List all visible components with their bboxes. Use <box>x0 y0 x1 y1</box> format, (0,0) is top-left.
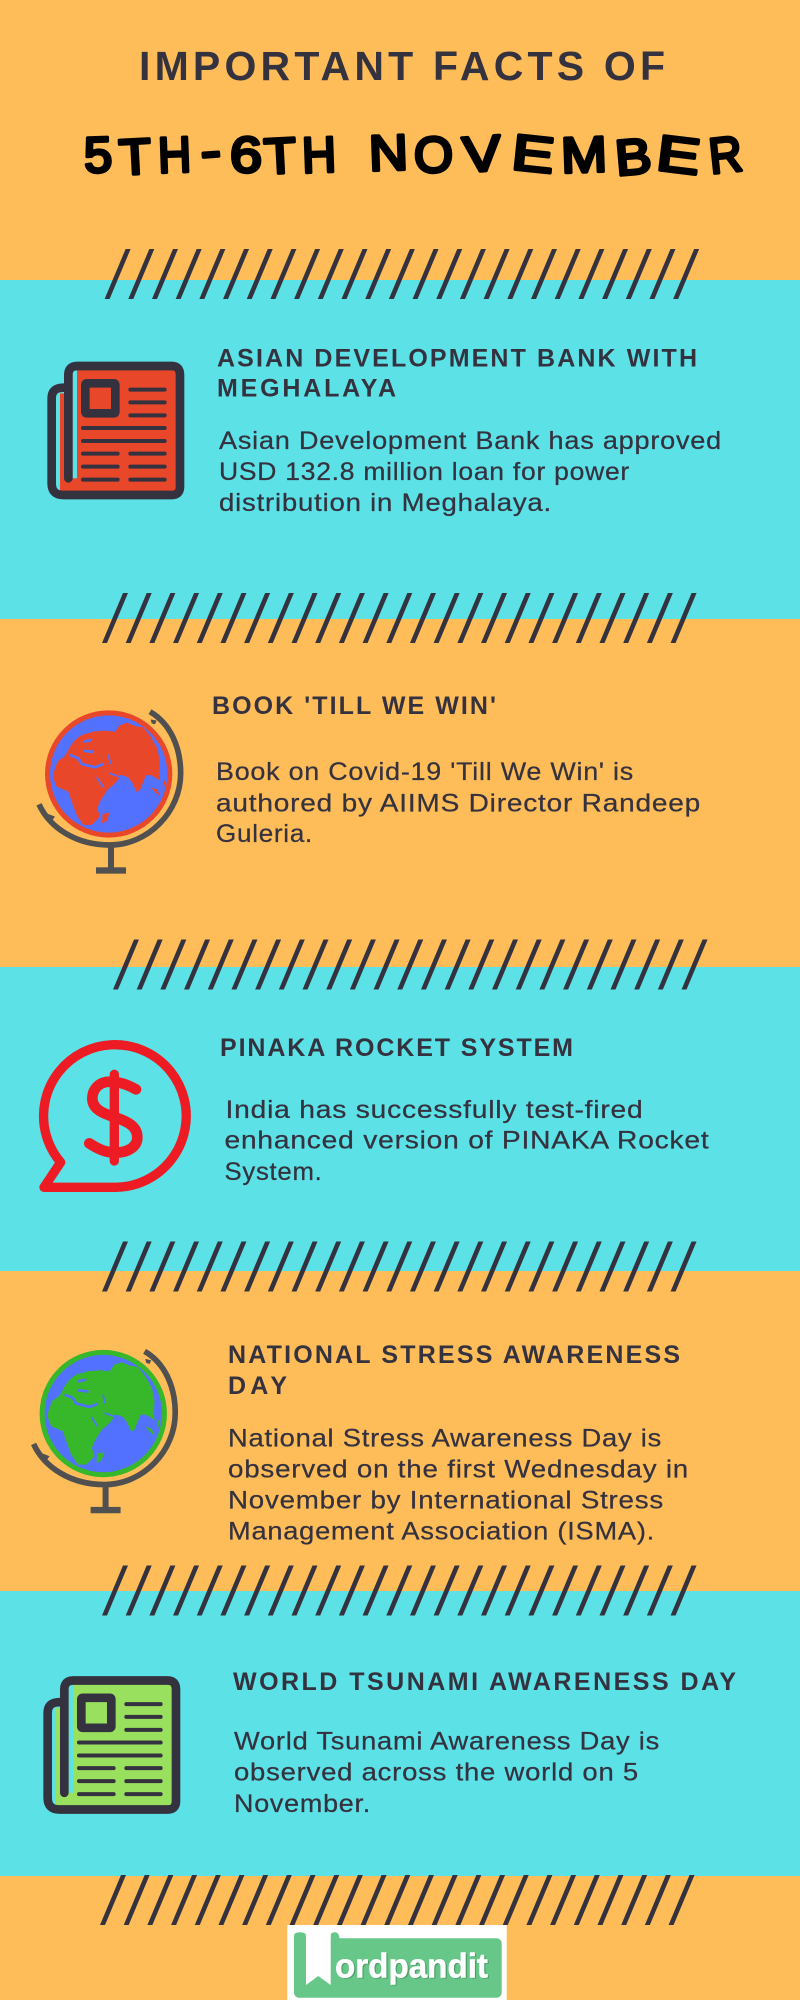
title: date <box>83 122 745 186</box>
title: important facts of: IMPORTANT FACTS OF <box>139 43 665 89</box>
title: date: 5 <box>83 127 113 183</box>
text block: November by International Stress <box>228 1486 664 1514</box>
title: date: N <box>368 124 409 182</box>
title: date: 6 <box>230 127 262 183</box>
icon: red globe <box>39 710 181 874</box>
heading: PINAKA ROCKET SYSTEM <box>220 1034 573 1062</box>
logo: Wordpandit: ordpandit <box>335 1947 488 1985</box>
text block: Management Association (ISMA). <box>228 1518 655 1546</box>
heading: DAY <box>228 1372 287 1400</box>
text block: observed on the first Wednesday in <box>228 1456 689 1484</box>
title: date: T <box>263 127 297 185</box>
text block: World Tsunami Awareness Day is <box>234 1728 660 1756</box>
text block: Guleria. <box>216 820 313 848</box>
panel: Book Till We Win <box>0 619 800 967</box>
title: date: H <box>301 126 337 184</box>
logo: Wordpandit <box>287 1925 507 2000</box>
title: date: M <box>560 126 608 184</box>
icon: green newspaper <box>48 1680 176 1809</box>
heading: ASIAN DEVELOPMENT BANK WITH <box>217 344 697 372</box>
panel: World Tsunami Awareness Day <box>0 1591 800 1876</box>
title: date: B <box>613 128 654 186</box>
title: date: H <box>157 126 192 184</box>
heading <box>228 1341 680 1400</box>
title: date: T <box>118 128 153 186</box>
heading: MEGHALAYA <box>217 374 396 402</box>
heading: BOOK 'TILL WE WIN' <box>212 692 496 720</box>
text block: India has successfully test-fired <box>226 1096 644 1124</box>
panel: Asian Development Bank <box>0 280 800 619</box>
heading: NATIONAL STRESS AWARENESS <box>228 1341 680 1369</box>
title: date: V <box>461 125 504 183</box>
panel: footer <box>0 1876 800 2000</box>
text block <box>228 1424 689 1546</box>
text block: USD 132.8 million loan for power <box>219 458 630 486</box>
panel: Pinaka Rocket System <box>0 967 800 1271</box>
text block <box>224 1096 710 1186</box>
logo: Wordpandit: ordpandit <box>336 1948 490 1986</box>
text block: distribution in Meghalaya. <box>219 489 552 517</box>
text block: System. <box>224 1158 322 1186</box>
icon: dollar speech bubble <box>44 1045 186 1187</box>
text block <box>216 758 701 848</box>
heading: WORLD TSUNAMI AWARENESS DAY <box>233 1668 736 1696</box>
text block: authored by AIIMS Director Randeep <box>216 790 701 818</box>
icon: green globe <box>34 1350 175 1513</box>
text block: enhanced version of PINAKA Rocket <box>224 1126 710 1154</box>
panel: National Stress Awareness Day <box>0 1271 800 1591</box>
title: date: E <box>654 125 703 185</box>
panel: header <box>0 0 800 280</box>
text block: November. <box>234 1790 371 1818</box>
title: date: O <box>414 127 453 183</box>
heading <box>217 344 697 402</box>
title: date: E <box>509 124 557 184</box>
text block: National Stress Awareness Day is <box>228 1424 662 1452</box>
text block <box>234 1728 660 1818</box>
text block <box>219 427 722 517</box>
title: date: - <box>199 122 223 180</box>
text block: observed across the world on 5 <box>234 1758 639 1786</box>
text block: Asian Development Bank has approved <box>219 427 722 455</box>
icon: red newspaper <box>52 366 180 495</box>
text block: Book on Covid-19 'Till We Win' is <box>216 758 634 786</box>
title: date: R <box>706 125 745 185</box>
